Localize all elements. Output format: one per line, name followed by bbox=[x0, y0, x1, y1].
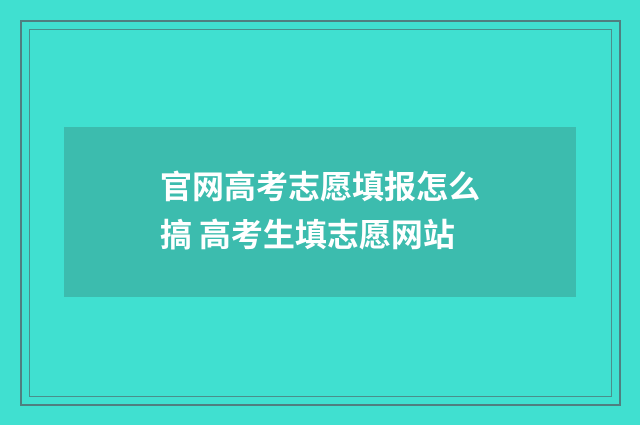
inner frame bbox=[29, 29, 612, 397]
title text bbox=[160, 169, 480, 253]
title panel bbox=[64, 127, 576, 297]
title text: 搞 高考生填志愿网站 bbox=[160, 217, 455, 253]
title text: 官网高考志愿填报怎么 bbox=[160, 169, 480, 205]
